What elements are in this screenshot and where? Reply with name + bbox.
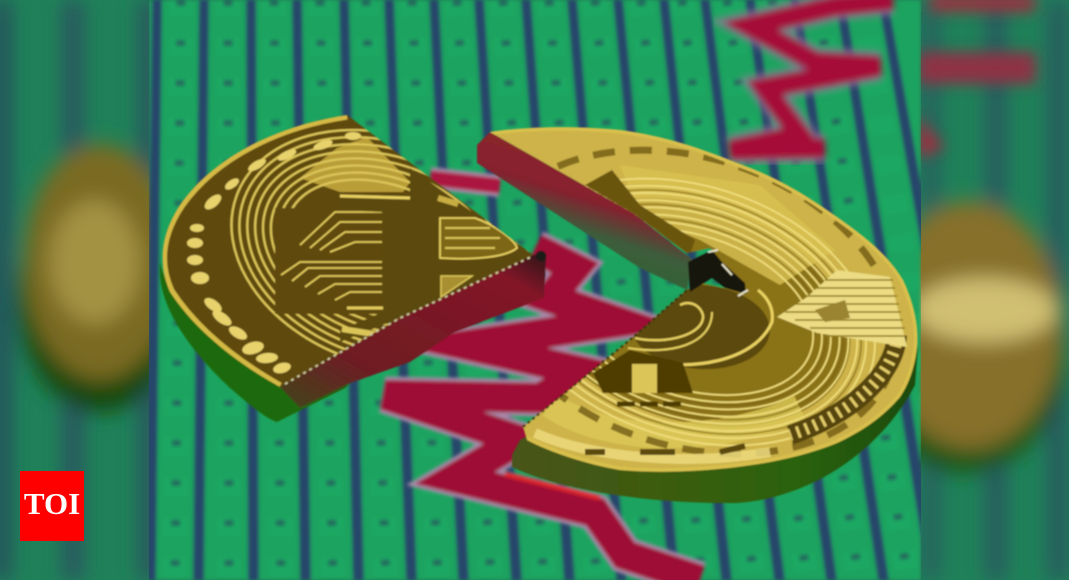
lower pale ring band bbox=[550, 405, 800, 435]
coin face: right bbox=[490, 127, 917, 472]
crack debris: black blob bbox=[688, 250, 748, 296]
lower rim highlight bbox=[535, 433, 770, 459]
coin break wall: right bbox=[477, 132, 693, 290]
coin emblem: B legs bbox=[593, 350, 693, 393]
blurred side panel: right bbox=[865, 0, 1069, 580]
coin emblem: dark B bowl bbox=[633, 284, 770, 370]
rim lettering: right bbox=[556, 146, 891, 457]
emblem detail panel bbox=[440, 218, 517, 259]
coin fragment: right half bbox=[476, 126, 918, 504]
blurred side panel: left bbox=[0, 0, 182, 580]
dark wedge by upper crack bbox=[585, 170, 695, 255]
circuit block: left bbox=[275, 208, 383, 314]
background: green digital text columns bbox=[144, 0, 960, 580]
coin fragment: left half bbox=[158, 114, 547, 423]
broken tip: left bbox=[536, 251, 546, 261]
central sharp photo bbox=[144, 0, 960, 580]
rim: right bbox=[490, 127, 917, 472]
rim lettering blobs: left bbox=[187, 132, 361, 375]
chart: lower section bbox=[385, 178, 700, 580]
coin emblem: dark X bbox=[340, 168, 533, 342]
logo: TOI: TOI bbox=[24, 486, 80, 521]
concentric rings: right bbox=[568, 177, 876, 448]
coin edge: right green thickness bbox=[512, 345, 918, 503]
upper pale ring wedge bbox=[300, 137, 410, 192]
concentric rings: left bbox=[229, 128, 530, 356]
red falling price chart bbox=[385, 0, 893, 580]
circuit block: right bbox=[777, 270, 907, 347]
serrated crack: right bbox=[523, 290, 687, 427]
chart: upper soft section bbox=[730, 0, 893, 150]
coin edge: left green thickness bbox=[158, 262, 350, 423]
coin break wall: left bbox=[280, 254, 546, 408]
serrated crack: left bbox=[285, 256, 533, 384]
coin face: left bbox=[163, 115, 533, 387]
inner dark disc bbox=[585, 198, 851, 426]
rim: left bbox=[164, 116, 347, 386]
logo: TOI bbox=[20, 471, 84, 541]
upper pale ring band bbox=[620, 165, 835, 285]
